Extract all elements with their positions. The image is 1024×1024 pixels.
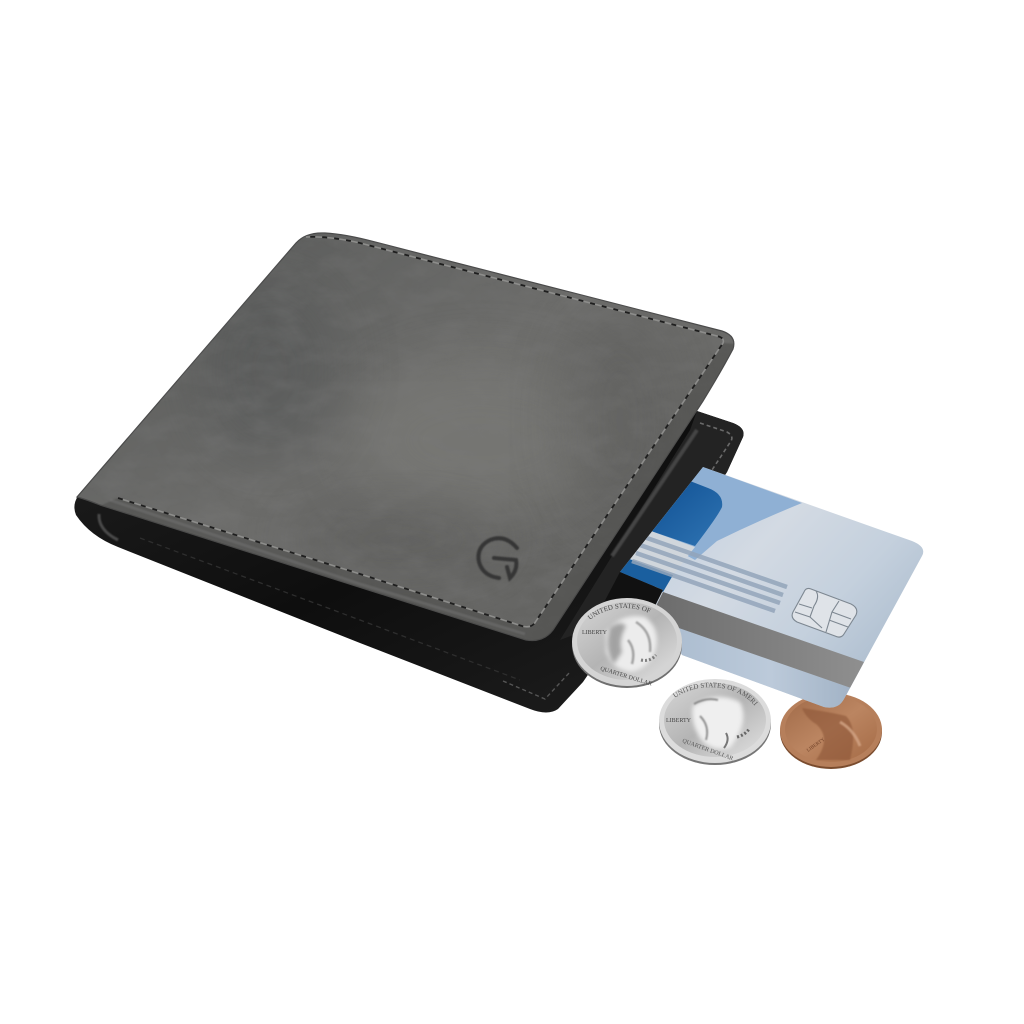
card dark blue block — [648, 481, 722, 546]
coin: quarter centre — [659, 679, 771, 765]
embossed logo — [478, 538, 517, 578]
wallet rear panel — [560, 411, 744, 640]
coin: penny — [780, 693, 882, 769]
coin: penny: LIBERTY — [806, 737, 827, 754]
penny portrait — [802, 708, 853, 760]
wallet top cover — [70, 225, 745, 650]
card light blue panel — [640, 467, 802, 560]
quarter legends — [675, 687, 756, 708]
card translucent band — [630, 532, 695, 566]
card lower band — [679, 628, 850, 708]
illustration: wallet with card and coins — [74, 232, 924, 769]
quarter legends — [590, 608, 665, 625]
wallet lower body — [74, 400, 744, 712]
coin: quarter centre: LIBERTY — [666, 718, 692, 724]
coin: quarter at wallet: LIBERTY — [582, 630, 608, 636]
leather grain — [167, 294, 584, 393]
coin: quarter at wallet: QUARTER DOLLAR — [599, 666, 653, 688]
credit card — [618, 467, 923, 720]
coin: quarter at wallet — [572, 598, 682, 688]
card printed lines — [632, 537, 787, 611]
coin: quarter at wallet: UNITED STATES OF — [587, 603, 652, 619]
lower stitching — [140, 538, 520, 680]
front lip — [90, 343, 745, 650]
coin: quarter centre: QUARTER DOLLAR — [681, 738, 734, 762]
quarter portrait — [692, 697, 743, 749]
card lower blue block — [618, 558, 673, 592]
pocket shadow above coin — [600, 572, 663, 610]
quarter portrait — [606, 616, 657, 672]
coin: quarter centre: UNITED STATES OF AMERI — [672, 682, 758, 706]
leather shading — [390, 385, 570, 506]
fold highlight — [99, 514, 118, 540]
card magnetic strip — [650, 592, 864, 688]
card chip — [792, 588, 857, 637]
cover stitching — [118, 237, 723, 627]
